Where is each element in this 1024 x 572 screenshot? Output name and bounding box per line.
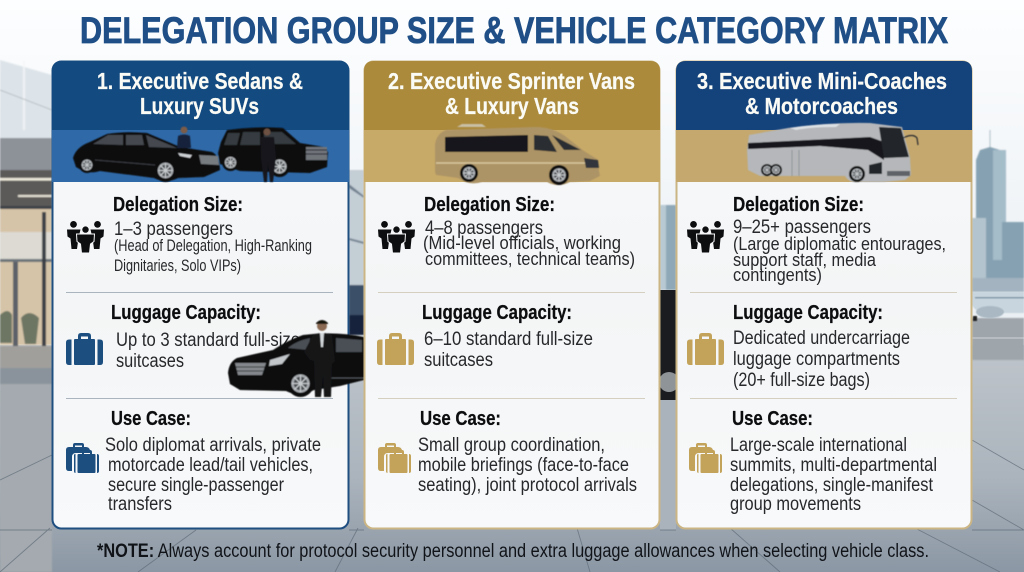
delegation size section: support staff, media	[733, 250, 877, 270]
use case section: Use Case:	[420, 408, 501, 430]
illustration: black sedan and SUV with chauffeurs	[73, 126, 328, 182]
panel: executive sedans and luxury SUVs	[52, 61, 364, 528]
card body	[52, 62, 348, 528]
use case section: Solo diplomat arrivals, private	[105, 435, 321, 456]
use case section: delegations, single-manifest	[730, 475, 934, 496]
card header band	[676, 61, 972, 182]
card header band	[364, 61, 660, 182]
use case section: Use Case:	[111, 408, 191, 430]
delegation size section: Delegation Size:	[113, 194, 243, 216]
use case section	[66, 408, 321, 515]
luggage capacity section	[66, 302, 300, 372]
card header band: & Luxury Vans	[445, 93, 579, 119]
delegation size section: 4–8 passengers	[425, 218, 543, 239]
luggage capacity section: Luggage Capacity:	[733, 302, 883, 324]
use case section: group movements	[730, 494, 861, 515]
delegation size section: committees, technical teams)	[425, 249, 635, 269]
delegation size section: 1–3 passengers	[114, 219, 233, 240]
use case section: seating), joint protocol arrivals	[418, 475, 637, 496]
card header band: 3. Executive Mini-Coaches	[697, 68, 947, 94]
luggage capacity section: Luggage Capacity:	[111, 302, 261, 324]
luggage capacity section: suitcases	[424, 350, 493, 371]
use case section	[378, 408, 637, 496]
delegation size section: (Mid-level officials, working	[423, 233, 621, 253]
luggage capacity section: Dedicated undercarriage	[733, 328, 910, 349]
luggage capacity section	[377, 302, 593, 371]
delegation size section	[67, 194, 312, 275]
use case section: transfers	[108, 494, 172, 515]
use case section: mobile briefings (face-to-face	[418, 455, 629, 476]
card header band	[52, 61, 349, 182]
card header band: Luxury SUVs	[140, 93, 259, 119]
use case section: Use Case:	[732, 408, 813, 430]
luggage capacity section	[687, 302, 910, 391]
use case section: summits, multi-departmental	[730, 455, 937, 476]
luggage capacity section: Luggage Capacity:	[422, 302, 572, 324]
card header band: 2. Executive Sprinter Vans	[388, 68, 635, 94]
use case section	[689, 408, 937, 515]
panel: executive sprinter vans and luxury vans	[364, 61, 660, 528]
card header band: 1. Executive Sedans &	[97, 68, 303, 94]
use case section: Large-scale international	[730, 435, 907, 456]
use case section: motorcade lead/tail vehicles,	[108, 455, 313, 476]
card header band: & Motorcoaches	[745, 93, 898, 119]
delegation size section: contingents)	[733, 265, 822, 285]
delegation size section	[378, 194, 635, 269]
luggage capacity section: Up to 3 standard full-size	[116, 330, 300, 351]
delegation size section: Delegation Size:	[424, 194, 555, 216]
luggage capacity section: 6–10 standard full-size	[424, 329, 593, 350]
illustration: gold sprinter van	[435, 124, 600, 185]
delegation size section: Delegation Size:	[733, 194, 864, 216]
delegation size section: (Head of Delegation, High-Ranking	[114, 236, 312, 255]
panel: executive mini-coaches and motorcoaches	[676, 61, 972, 528]
card body	[676, 62, 972, 528]
delegation size section: 9–25+ passengers	[733, 217, 871, 238]
card body	[364, 62, 660, 528]
illustration: silver motorcoach	[747, 123, 918, 182]
delegation size section: Dignitaries, Solo VIPs)	[114, 256, 241, 275]
illustration: limousine with standing chauffeur	[228, 320, 364, 397]
airplane	[972, 292, 1024, 321]
luggage capacity section: suitcases	[116, 351, 184, 372]
luggage capacity section: luggage compartments	[733, 349, 900, 370]
luggage capacity section: (20+ full-size bags)	[733, 370, 870, 391]
delegation size section: (Large diplomatic entourages,	[733, 234, 946, 254]
use case section: Small group coordination,	[418, 435, 605, 456]
use case section: secure single-passenger	[108, 475, 285, 496]
delegation size section	[687, 194, 946, 285]
